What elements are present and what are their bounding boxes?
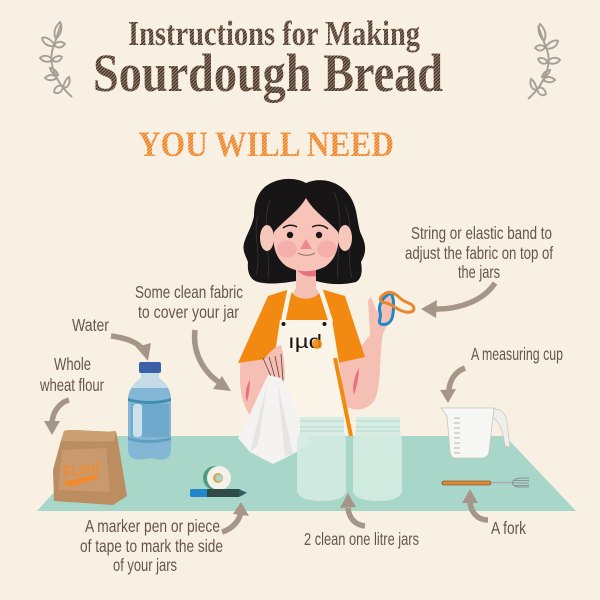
apron rivets xyxy=(282,322,286,326)
right arm and hand xyxy=(338,290,395,410)
armpit marks xyxy=(246,368,359,402)
neck xyxy=(292,262,320,303)
arrow: string xyxy=(421,283,495,318)
orange shirt xyxy=(238,289,365,430)
arrow: measuring cup xyxy=(440,368,465,403)
label: flour: Whole xyxy=(54,354,91,374)
label: measuring cup: A measuring cup xyxy=(471,344,563,364)
title line 1: Instructions for Making xyxy=(128,14,420,53)
right jar xyxy=(353,417,402,501)
label: jars: 2 clean one litre jars xyxy=(304,529,419,549)
label: marker: A marker pen or piece xyxy=(85,516,220,536)
label: fork: A fork xyxy=(491,518,526,538)
label: flour: wheat flour xyxy=(39,375,104,395)
label: fabric: to cover your jar xyxy=(138,302,239,322)
illustration: marker pen xyxy=(190,489,247,497)
label: string: the jars xyxy=(458,262,500,282)
nose xyxy=(300,239,312,249)
label: marker: of tape to mark the side xyxy=(80,536,223,556)
left arm xyxy=(240,358,275,415)
holding hand xyxy=(260,345,285,388)
hair strands xyxy=(256,192,352,278)
illustration: woman with apron xyxy=(238,179,395,436)
eyebrows xyxy=(283,225,328,229)
arrow: fabric xyxy=(195,330,231,391)
label: fabric xyxy=(135,282,243,322)
arrow: flour xyxy=(44,400,69,435)
eyes xyxy=(287,232,293,238)
icon: elastic bands xyxy=(379,292,414,325)
icon: left laurel sprig xyxy=(40,22,72,97)
title line 2: Sourdough Bread xyxy=(93,43,443,103)
table surface xyxy=(37,436,576,511)
arrow: marker xyxy=(222,502,249,532)
illustration: white cloth xyxy=(238,375,310,464)
arrow: jars xyxy=(340,493,365,526)
label: water: Water xyxy=(72,315,109,335)
hair xyxy=(243,179,365,284)
label: string xyxy=(405,223,553,282)
apron straps xyxy=(283,288,331,322)
flour label: FLour xyxy=(61,457,103,482)
label: marker xyxy=(80,516,223,575)
label: flour xyxy=(39,354,104,395)
face xyxy=(274,198,338,271)
cheeks xyxy=(277,240,297,258)
label: marker: of your jars xyxy=(113,555,177,575)
ears xyxy=(260,225,274,251)
left jar xyxy=(297,417,346,501)
label: string: adjust the fabric on top of xyxy=(405,243,553,263)
arrow: water xyxy=(111,336,151,361)
apron logo: ıµd xyxy=(288,332,322,353)
illustration: water bottle xyxy=(128,362,171,460)
illustration: two glass jars xyxy=(297,417,402,501)
label: string: String or elastic band to xyxy=(411,223,552,243)
label: fabric: Some clean fabric xyxy=(135,282,243,302)
illustration: roll of tape xyxy=(203,466,231,490)
illustration: flour bag xyxy=(53,430,127,505)
illustration: measuring cup xyxy=(441,408,510,458)
arrow: fork xyxy=(462,489,488,520)
illustration: fork xyxy=(442,478,529,487)
icon: right laurel sprig xyxy=(528,24,560,99)
apron xyxy=(274,320,350,434)
apron string xyxy=(335,358,351,436)
heading: you will need: YOU WILL NEED xyxy=(138,124,394,164)
mouth xyxy=(298,253,315,255)
